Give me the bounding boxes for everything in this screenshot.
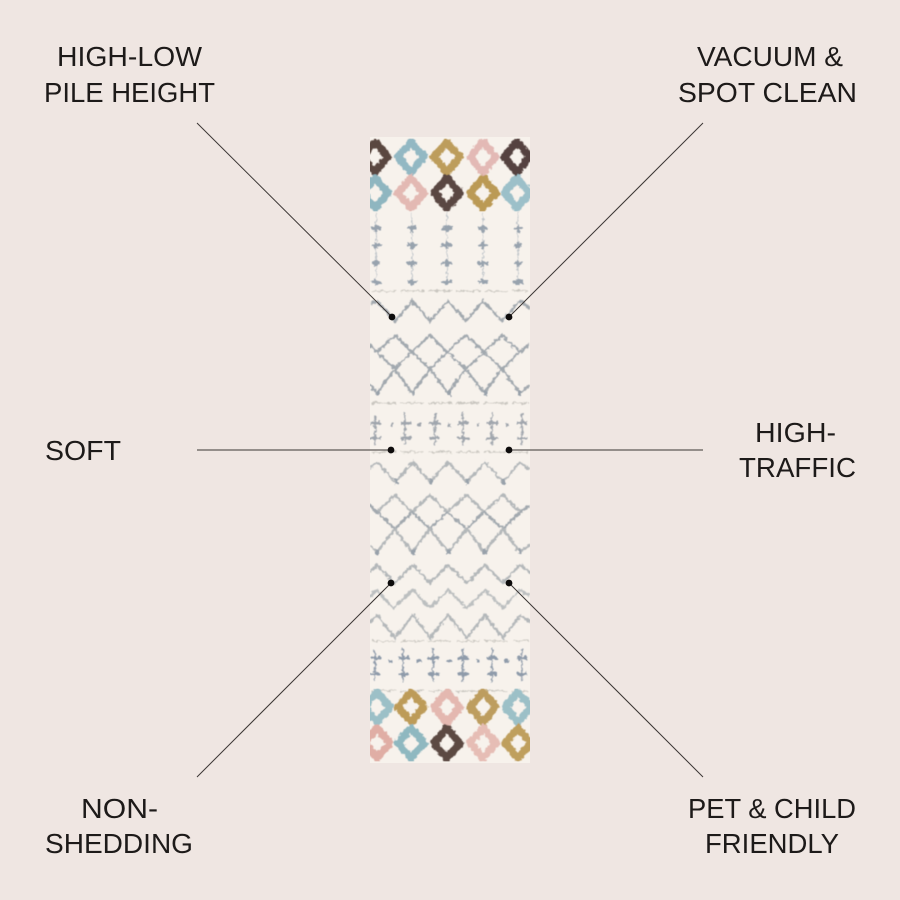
callout: high-low pile height: PILE HEIGHT — [44, 77, 215, 108]
callout: high-traffic: TRAFFIC — [739, 452, 856, 483]
callout: pet and child friendly — [506, 580, 856, 859]
bottom diamond rows — [364, 692, 531, 758]
callout: vacuum and spot clean — [506, 41, 857, 320]
callout: high-low pile height: HIGH-LOW — [57, 41, 203, 72]
callout: soft: SOFT — [45, 435, 121, 466]
callout: pet and child friendly: FRIENDLY — [705, 828, 839, 859]
callout: high-low pile height — [44, 41, 395, 320]
top diamond rows — [362, 142, 530, 208]
woven zigzag and lattice pattern — [370, 291, 530, 691]
callout: non-shedding — [45, 580, 394, 859]
callout: high-traffic — [506, 417, 856, 483]
callout: non-shedding: SHEDDING — [45, 828, 193, 859]
callout: vacuum and spot clean: SPOT CLEAN — [678, 77, 857, 108]
callout: soft — [45, 435, 394, 466]
callout: pet and child friendly: PET & CHILD — [688, 793, 856, 824]
callout: vacuum and spot clean: VACUUM & — [697, 41, 843, 72]
cross motifs — [370, 393, 527, 682]
rug illustration — [362, 137, 531, 763]
callout: high-traffic: HIGH- — [755, 417, 836, 448]
callout: non-shedding: NON- — [81, 793, 158, 824]
hanging tick motifs — [371, 212, 523, 285]
